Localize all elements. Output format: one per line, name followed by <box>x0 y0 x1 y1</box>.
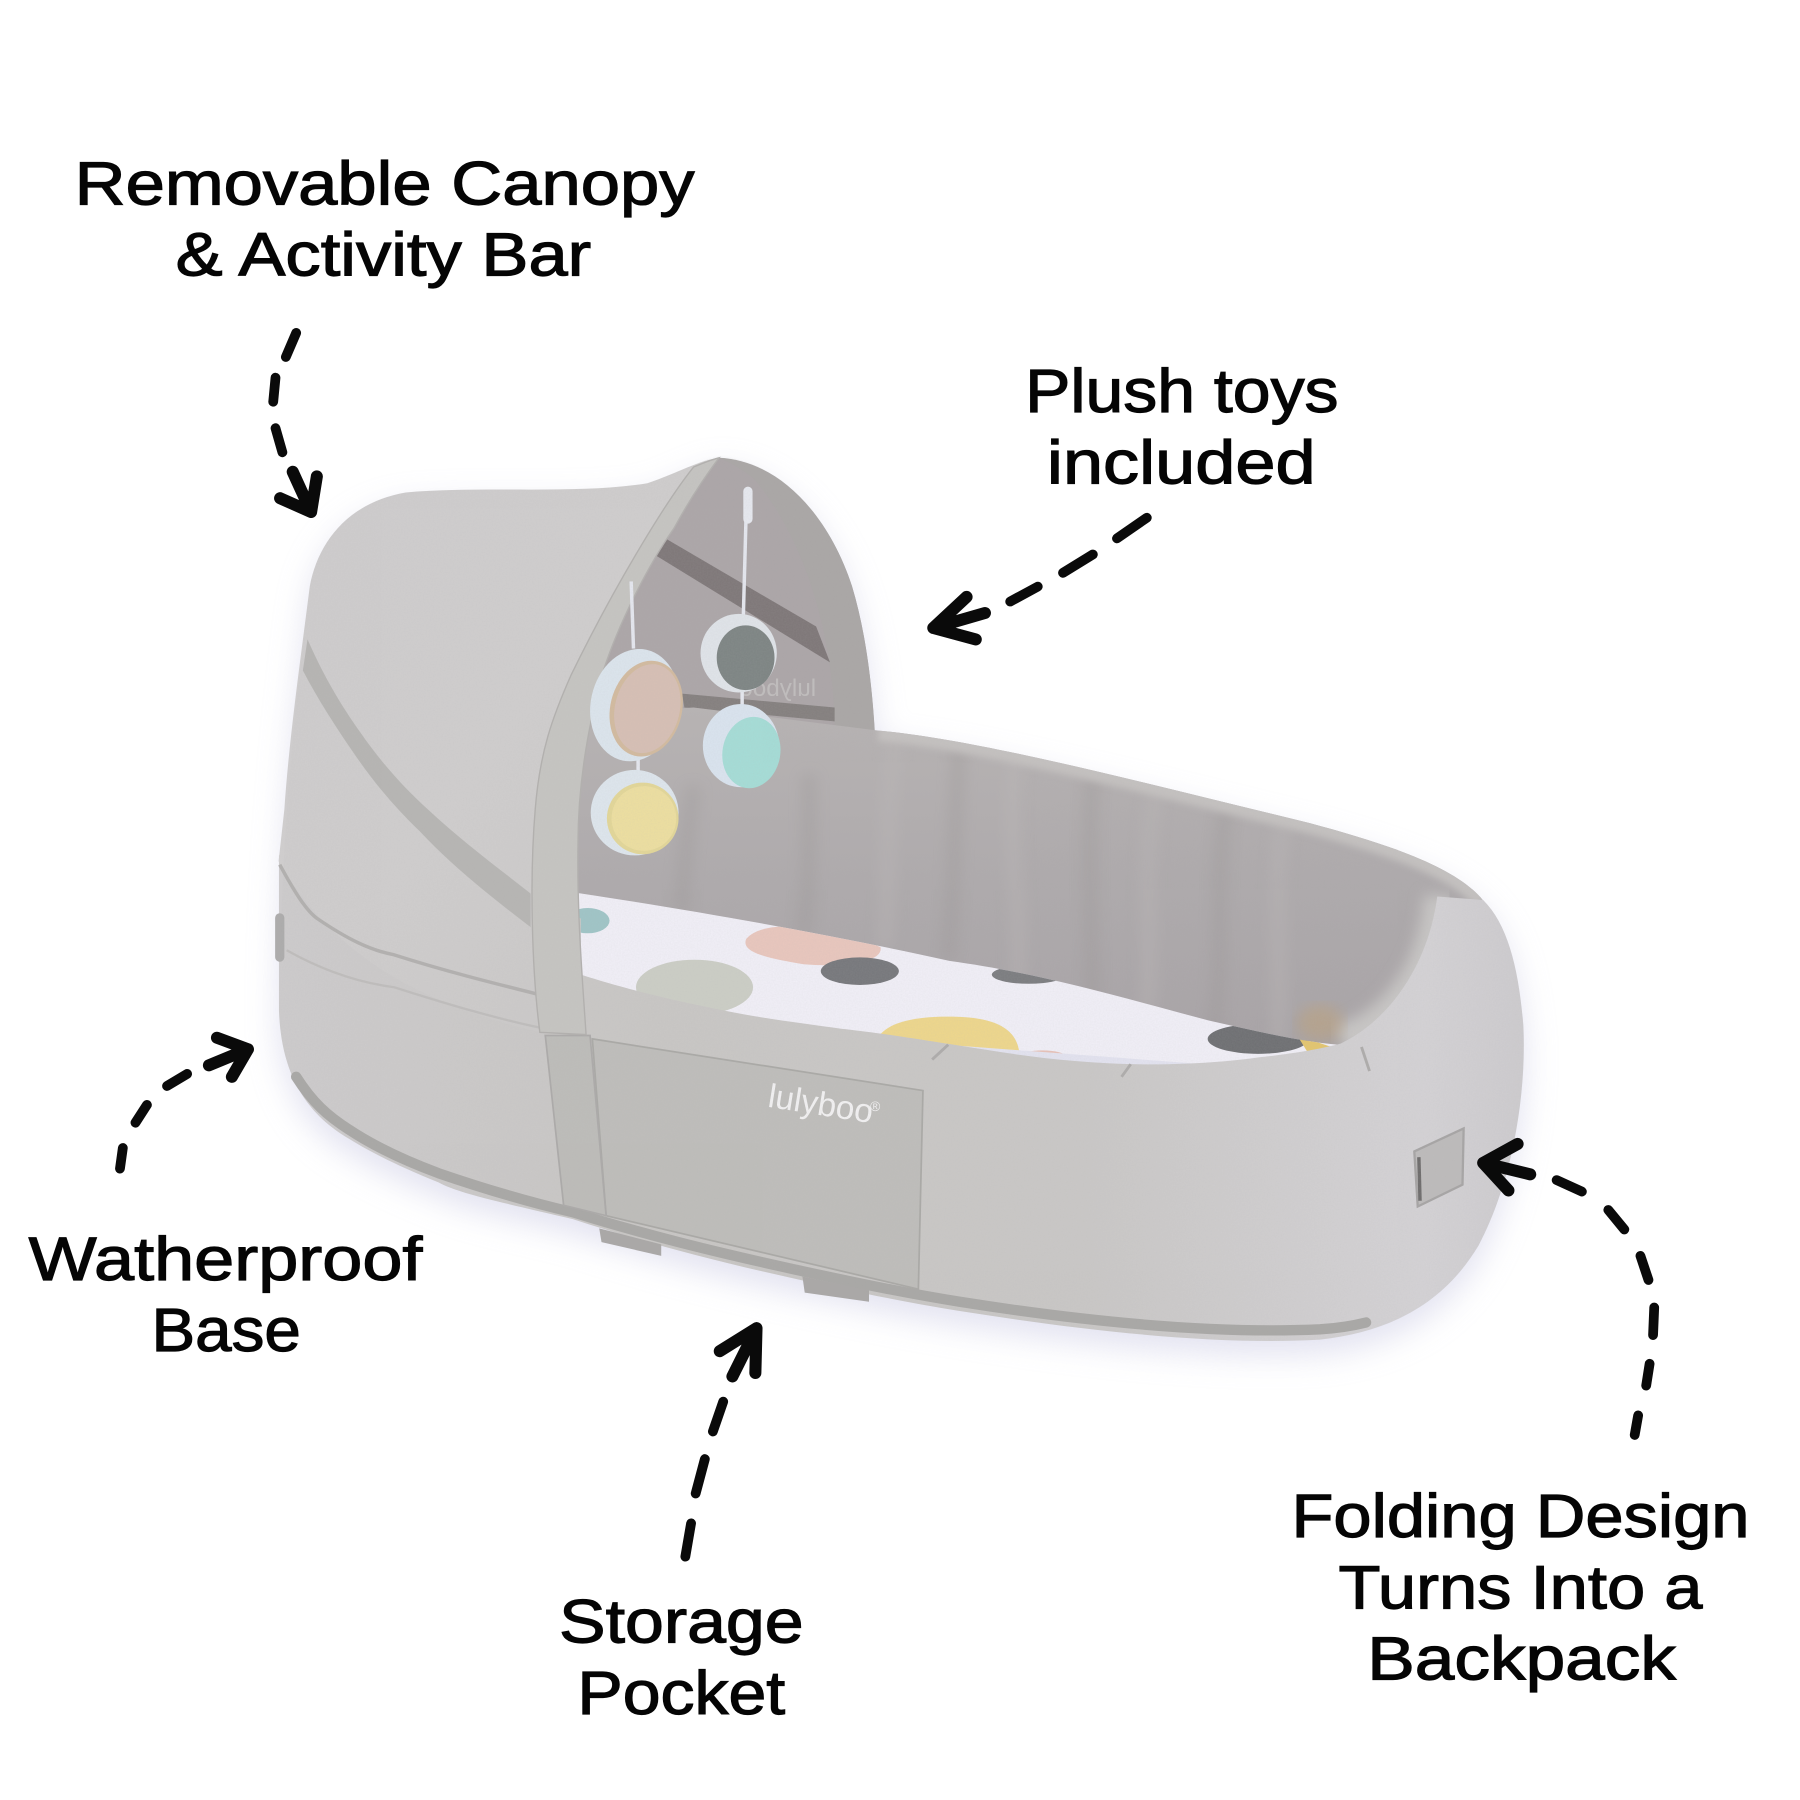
mattress with pastel dots <box>566 893 1352 1074</box>
canopy diagonal band <box>303 639 531 927</box>
carry strap <box>1414 1128 1464 1207</box>
zipper band <box>296 1077 1366 1330</box>
interior bumper wall <box>555 707 1497 1058</box>
label: Watherproof Base: Watherproof <box>29 1225 423 1293</box>
canopy arch interior: lulyboo <box>739 675 816 702</box>
label: Removable Canopy & Activity Bar <box>75 149 695 289</box>
hanging plush toys <box>580 487 786 855</box>
label: Storage Pocket: Pocket <box>577 1659 785 1727</box>
toy: pink <box>580 641 693 770</box>
label: Watherproof Base: Base <box>152 1296 301 1364</box>
arrow: to waterproof base <box>120 1038 248 1169</box>
arrow: to storage pocket <box>685 1328 757 1557</box>
canopy seam <box>280 865 538 994</box>
label: Storage Pocket <box>559 1588 804 1727</box>
base tabs <box>599 1228 869 1302</box>
arrow: to canopy <box>273 333 317 512</box>
vertical strip on base <box>545 1035 606 1216</box>
logo patch <box>592 1039 923 1289</box>
label: Watherproof Base <box>29 1225 423 1364</box>
canopy hood <box>275 458 719 1035</box>
arrow: to folding handle <box>1483 1144 1654 1435</box>
label: Folding Design Turns Into a Backpack <box>1291 1482 1749 1692</box>
side button <box>275 913 284 962</box>
toy: grey <box>701 614 777 692</box>
toy strings <box>631 490 747 786</box>
product photo: bassinet <box>275 458 1524 1355</box>
toy: mint <box>703 704 786 793</box>
outer base body <box>279 855 1524 1341</box>
label: Removable Canopy & Activity Bar: & Activity Bar <box>176 221 591 289</box>
label: Plush toys included: Plush toys <box>1025 357 1339 425</box>
label: Storage Pocket: Storage <box>559 1588 804 1656</box>
canopy front strip <box>532 458 719 1035</box>
label: Plush toys included: included <box>1047 428 1316 496</box>
label: Removable Canopy & Activity Bar: Removable Canopy <box>75 149 695 217</box>
logo patch: lulyboo <box>766 1078 876 1131</box>
label: Plush toys included <box>1025 357 1339 496</box>
fabric texture <box>264 442 1538 1349</box>
label: Folding Design Turns Into a Backpack: Folding Design <box>1291 1482 1749 1550</box>
toy: yellow <box>591 770 679 855</box>
logo patch: ® <box>870 1099 880 1114</box>
label: Folding Design Turns Into a Backpack: Backpack <box>1367 1624 1677 1692</box>
label: Folding Design Turns Into a Backpack: Turns Into a <box>1339 1553 1703 1621</box>
canopy arch interior <box>555 458 875 763</box>
arrow: to plush toys <box>933 518 1147 639</box>
